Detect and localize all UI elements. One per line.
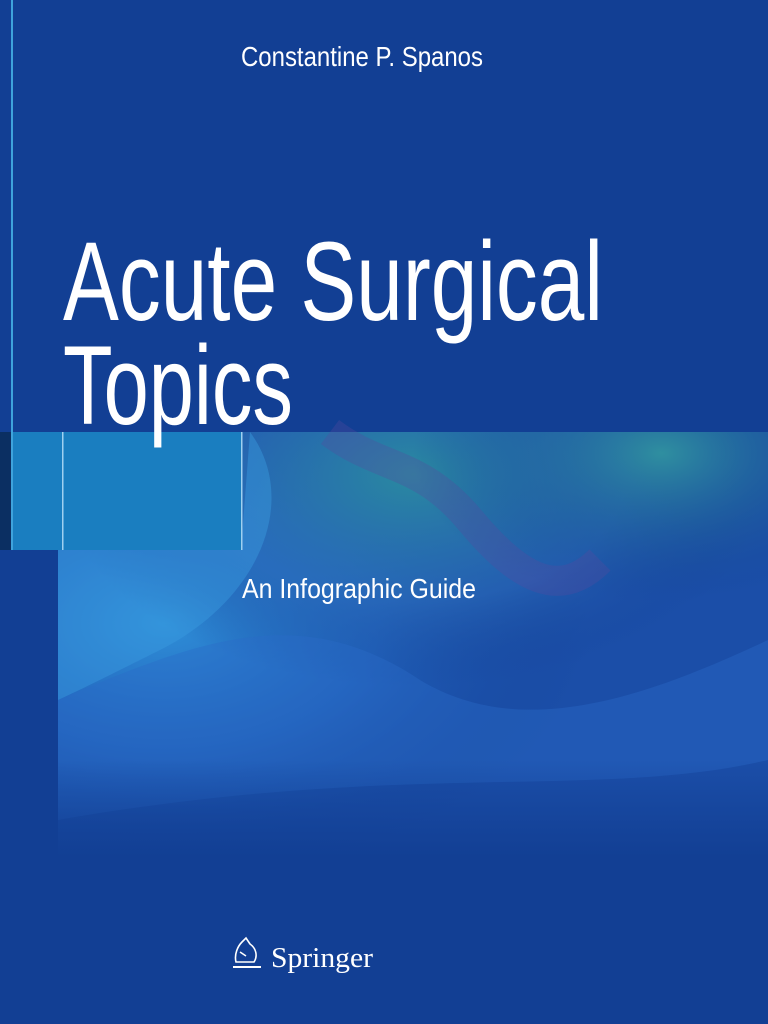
band panel [0,0,242,550]
title: Acute Surgical [63,219,603,344]
title: Topics [63,323,293,448]
author: Constantine P. Spanos [241,41,483,72]
subtitle: An Infographic Guide [242,573,476,604]
publisher logo [233,938,374,974]
abstract image [58,432,768,857]
title [63,219,603,448]
publisher logo: Springer [271,943,374,974]
icon: knight [233,938,261,968]
